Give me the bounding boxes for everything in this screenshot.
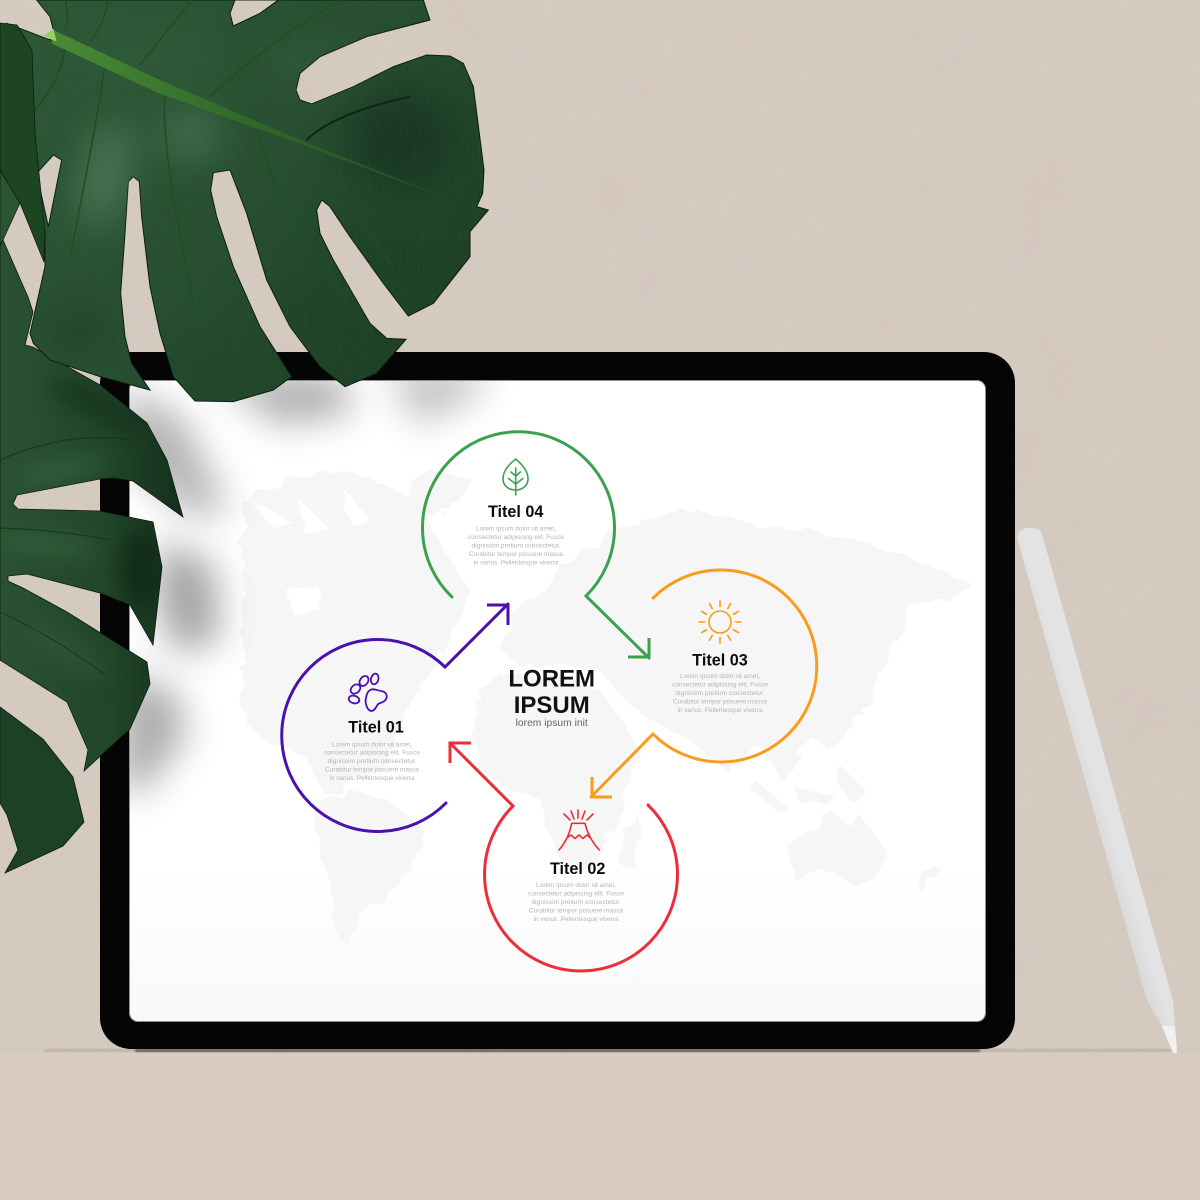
table contact shadow <box>45 1049 1175 1052</box>
arrow: orange outline into step 02 <box>591 570 817 797</box>
text block: step 03 body <box>672 674 769 714</box>
panel: step 02 red circle and arrow <box>450 743 678 971</box>
icon: volcano <box>559 810 599 850</box>
text block: step 02 body: dignissim pretium consectetur. <box>532 900 621 906</box>
text block: step 03 body: in varius. Pellentesque viverra <box>678 708 763 714</box>
text block: step 04 body: consectetur adipiscing elit. Fusce <box>468 535 565 541</box>
title: central Lorem Ipsum <box>508 666 595 729</box>
text block: step 04 body <box>468 526 565 566</box>
leaf shadows on screen <box>120 370 490 795</box>
panel: step 04 green circle and arrow <box>422 432 649 658</box>
heading: Titel 02: Titel 02 <box>550 860 605 878</box>
heading: Titel 03: Titel 03 <box>692 652 748 670</box>
large monstera leaf <box>0 0 500 417</box>
text block: step 02 body: Curabitur tempor posuere massa <box>529 908 624 914</box>
text block: step 01 body: in varius. Pellentesque viverra <box>330 776 415 782</box>
text block: step 01 body: Curabitur tempor posuere massa <box>325 768 420 774</box>
dark front monstera lobe <box>0 23 45 262</box>
panel: step 03 orange circle and arrow <box>591 570 817 797</box>
heading: Titel 01: Titel 01 <box>348 719 404 737</box>
icon: leaf <box>503 459 528 495</box>
text block: step 03 body: Lorem ipsum dolor sit amet, <box>680 674 760 680</box>
text block: step 02 body: consectetur adipiscing elit. Fusce <box>528 891 625 897</box>
text block: step 03 body: consectetur adipiscing elit. Fusce <box>672 682 769 688</box>
text block: step 01 body: Lorem ipsum dolor sit amet, <box>332 742 412 748</box>
text block: step 04 body: Lorem ipsum dolor sit amet, <box>476 526 556 532</box>
tablet device <box>100 352 1015 1049</box>
arrow: green outline into step 03 <box>422 432 649 658</box>
heading: Titel 04: Titel 04 <box>488 503 543 521</box>
icon: stylus pencil <box>1017 528 1177 1053</box>
text block: step 04 body: in varius. Pellentesque viverra <box>474 560 559 566</box>
icon: sun <box>699 601 741 643</box>
text block: step 03 body: dignissim pretium consectetur. <box>676 691 765 697</box>
text block: step 04 body: dignissim pretium consectetur. <box>472 544 561 550</box>
text block: step 01 body <box>324 742 421 782</box>
text block: step 02 body: Lorem ipsum dolor sit amet, <box>536 883 616 889</box>
title: central Lorem Ipsum: LOREM <box>508 666 595 693</box>
arrow: purple outline into step 04 <box>282 604 508 831</box>
text block: step 02 body: in varius. Pellentesque viverra <box>534 917 619 923</box>
icon: paw <box>348 673 387 711</box>
arrow: red outline into step 01 <box>450 743 678 971</box>
lower monstera leaf <box>0 170 183 873</box>
text block: step 01 body: consectetur adipiscing elit. Fusce <box>324 751 421 757</box>
text block: step 02 body <box>528 883 625 923</box>
text block: step 04 body: Curabitur tempor posuere massa <box>469 552 564 558</box>
title: central Lorem Ipsum: IPSUM <box>514 692 590 719</box>
text block: step 03 body: Curabitur tempor posuere massa <box>673 699 768 705</box>
world map background <box>238 470 972 886</box>
panel: step 01 purple circle and arrow <box>282 604 508 831</box>
title: central Lorem Ipsum: lorem ipsum init <box>516 718 588 729</box>
text block: step 01 body: dignissim pretium consectetur. <box>328 759 417 765</box>
